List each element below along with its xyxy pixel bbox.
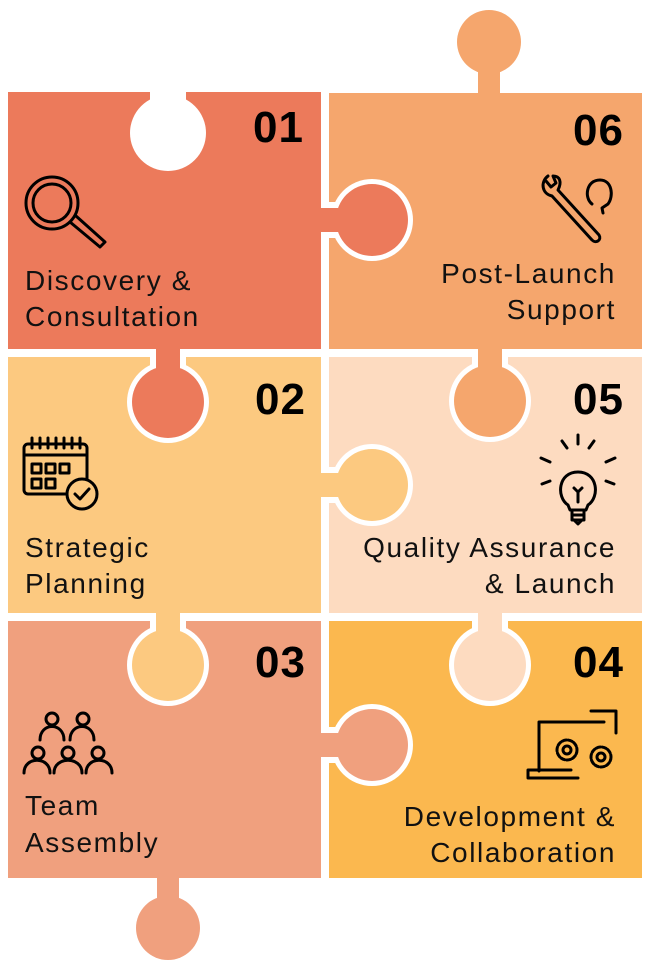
number 06: 06: [573, 106, 624, 155]
knob: 01 to 02: [132, 346, 204, 438]
number 04: 04: [573, 638, 624, 687]
label 02: Planning: [25, 568, 147, 599]
icon: magnifier: [26, 177, 105, 247]
label 05: & Launch: [485, 568, 616, 599]
knob outlines: [127, 6, 531, 964]
icon: wrench and headset: [543, 176, 611, 242]
label 02: Strategic: [25, 532, 150, 563]
piece 06: [329, 93, 642, 349]
knob: 03 to 04: [318, 709, 408, 781]
icon: laptop with gears: [528, 711, 616, 778]
number 01: 01: [253, 103, 304, 152]
piece 04: [329, 621, 642, 878]
piece 01: [8, 92, 321, 349]
label 01: Discovery &: [25, 265, 192, 296]
knob: 01 to 06: [318, 184, 408, 256]
label 04: Collaboration: [430, 837, 616, 868]
knob: 06 to 05: [454, 346, 526, 437]
label 03: Assembly: [25, 827, 159, 858]
number 02: 02: [255, 375, 306, 424]
piece 03: [8, 621, 321, 878]
knob: 02 to 03: [132, 610, 204, 701]
label 06: Support: [507, 294, 616, 325]
label 01: Consultation: [25, 301, 200, 332]
knob: 06 top: [457, 10, 521, 95]
knob: 02 to 05: [318, 449, 408, 521]
label 04: Development &: [404, 801, 616, 832]
label 03: Team: [25, 790, 100, 821]
icon: calendar: [24, 438, 97, 509]
icon: light bulb: [541, 435, 615, 524]
piece 02: [8, 357, 321, 613]
icon: team: [24, 713, 112, 773]
piece 05: [329, 357, 642, 613]
number 03: 03: [255, 638, 306, 687]
number 05: 05: [573, 375, 624, 424]
knob: 05 to 04: [454, 610, 526, 701]
label 05: Quality Assurance: [363, 532, 616, 563]
label 06: Post-Launch: [441, 258, 616, 289]
knob: 03 bottom: [136, 875, 200, 960]
